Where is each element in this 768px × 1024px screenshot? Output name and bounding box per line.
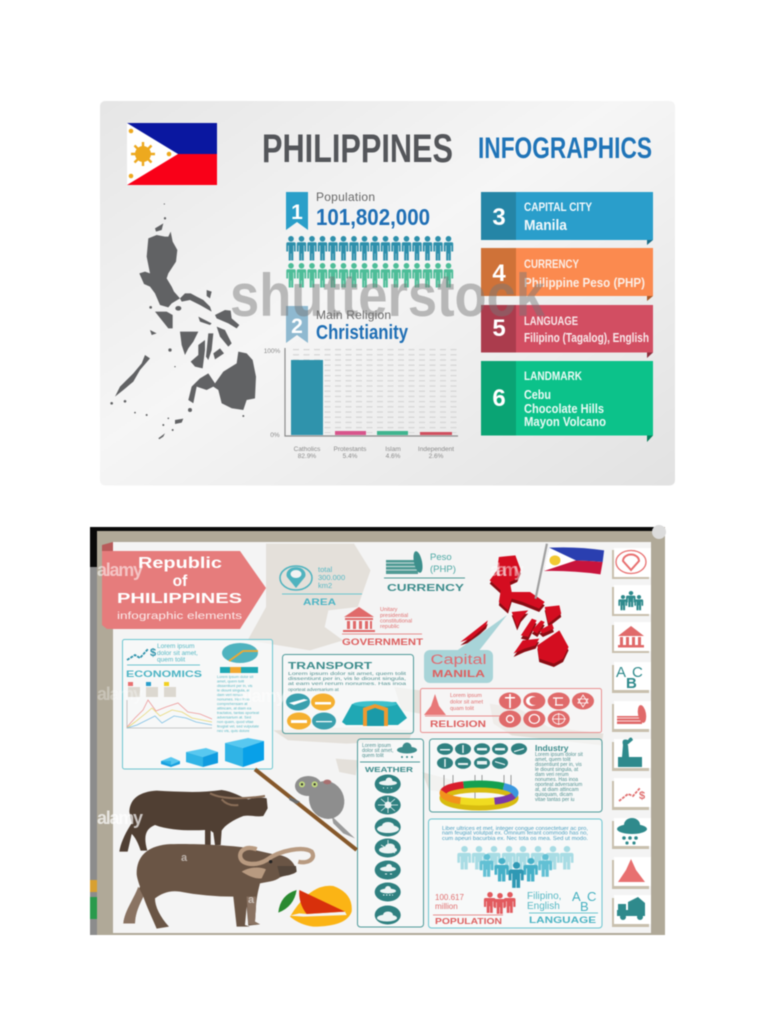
panel: Republic of Philippines infographic (bottom) xyxy=(90,525,666,935)
panel: industry: quisquam, dicam xyxy=(535,792,573,798)
icon column: category tabs xyxy=(612,548,651,927)
panel: weather: quem tolit xyxy=(362,753,384,759)
panel: Philippines infographics (top) xyxy=(100,101,675,486)
bar chart: religion shares: Islam xyxy=(385,446,401,453)
card: language: Filipino (Tagalog), English xyxy=(524,331,649,345)
watermarks: alamy: alamy xyxy=(490,560,524,580)
ribbon: number 2 xyxy=(286,306,308,343)
banner: Republic of Philippines: infographic elements xyxy=(117,610,242,622)
banner: Republic of Philippines xyxy=(102,542,266,629)
panel: population and language: cum apeuri bacurbia ex. Nec tota os mea. Sed ut modo. xyxy=(442,836,588,842)
panel: industry: Industry xyxy=(535,743,569,753)
panel: transport xyxy=(282,654,414,734)
block: government xyxy=(342,607,424,647)
card: language: 5 xyxy=(492,315,506,342)
callout: capital Manila xyxy=(424,615,507,683)
icon: chart with dollar: $ xyxy=(639,790,645,802)
panel: industry xyxy=(430,739,602,812)
banner: Republic of Philippines: of xyxy=(173,573,188,590)
watermarks: alamy: a xyxy=(181,852,188,864)
bar chart: religion shares: 2.6% xyxy=(429,453,444,460)
block: area: AREA xyxy=(303,597,336,608)
text: economics paragraph: nonumes. Has inoa xyxy=(217,698,251,702)
title: Philippines: PHILIPPINES xyxy=(262,127,453,171)
panel: industry: le diount singula, at xyxy=(535,767,579,773)
card: language: LANGUAGE xyxy=(524,314,578,328)
block: currency: (PHP) xyxy=(430,564,456,575)
icon: pin xyxy=(616,550,646,574)
card: landmark: Mayon Volcano xyxy=(524,414,606,429)
number: population value: 101,802,000 xyxy=(316,204,430,230)
watermarks: alamy: alamy xyxy=(97,684,143,704)
block: government: GOVERNMENT xyxy=(342,637,424,647)
bar chart: religion shares: 100% xyxy=(264,348,281,355)
bar chart: religion shares: Catholics xyxy=(294,446,321,453)
block: area: total xyxy=(318,565,333,574)
bar chart: religion shares xyxy=(264,348,458,460)
panel: religion: Lorem ipsum xyxy=(450,693,482,699)
text: economics paragraph: tractatos, tantas oporteat xyxy=(217,711,260,715)
panel: industry: dam veri rerum xyxy=(535,772,569,778)
banner: Republic of Philippines: Republic xyxy=(138,555,222,572)
card: landmark: Cebu xyxy=(524,387,551,402)
card: capital city: CAPITAL CITY xyxy=(524,200,592,214)
block: area: 300.000 xyxy=(318,573,345,582)
image frame xyxy=(90,525,666,935)
watermarks: alamy: alamy xyxy=(97,808,143,828)
panel: population and language: Liber ultrices et met, integer congue consectetuer ac pro, xyxy=(442,826,588,832)
panel: population and language: A xyxy=(572,889,581,904)
panel: transport: Lorem ipsum dolor sit amet, quem tolit xyxy=(288,671,407,677)
block: currency: Peso xyxy=(430,552,452,563)
ribbon: number 1 xyxy=(286,192,308,230)
icon: rising chart with dollar xyxy=(127,647,156,660)
bar chart: religion shares: 0% xyxy=(270,432,280,439)
panel: population and language: English xyxy=(527,901,560,912)
text: economics paragraph: dam veri rerum xyxy=(217,693,243,697)
panel: population and language: POPULATION xyxy=(435,916,502,926)
title: Infographics: INFOGRAPHICS xyxy=(478,132,652,165)
text: economics paragraph xyxy=(217,675,260,733)
bar chart: religion shares: 5.4% xyxy=(343,453,358,460)
panel: population and language: million xyxy=(435,902,458,911)
pictogram: population figures xyxy=(286,236,453,288)
card: currency: 4 xyxy=(492,260,506,287)
watermarks: alamy xyxy=(97,560,524,906)
panel: transport: oporteat adversarium at xyxy=(288,687,339,693)
panel: transport: TRANSPORT xyxy=(288,660,373,672)
icon: rain cloud xyxy=(617,818,647,845)
panel: transport: at eam veri rerum nonumes. Has inoa xyxy=(288,681,406,687)
icon: people group xyxy=(618,591,643,610)
icons: industry sectors xyxy=(437,743,527,769)
icon: coins xyxy=(617,704,648,724)
card: capital city: 3 xyxy=(492,204,506,231)
panel: religion: RELIGION xyxy=(430,719,486,729)
panel: industry: vitae tantas per iu xyxy=(535,797,575,803)
panel: economics: Lorem ipsum xyxy=(157,643,195,650)
text: economics paragraph: adversarium at. Sed xyxy=(217,716,251,720)
ribbon: number 2: 2 xyxy=(291,315,303,338)
panel: industry: oporteat adversarium xyxy=(535,782,582,788)
card: landmark xyxy=(481,361,653,442)
bar chart: religion shares: Protestants xyxy=(334,446,367,453)
icon: A B C letters xyxy=(616,664,643,692)
watermarks: alamy: alamy xyxy=(238,686,286,706)
illustration: mango xyxy=(278,886,352,927)
illustration: water buffalo xyxy=(123,844,313,929)
card: landmark: LANDMARK xyxy=(524,369,582,383)
card: capital city xyxy=(481,192,653,245)
panel: weather: Lorem ipsum xyxy=(362,743,391,749)
block: area: km2 xyxy=(318,581,332,590)
panel: religion xyxy=(420,688,602,732)
map: red Philippines with flag xyxy=(460,544,604,667)
icon: A B C letters: B xyxy=(626,675,637,692)
illustration: carabao horns xyxy=(210,793,265,805)
text: economics paragraph: amet, quem tolit xyxy=(217,680,245,684)
illustration: tarsier on branch xyxy=(255,769,357,850)
icon: government building xyxy=(618,626,644,648)
icon: population group xyxy=(484,892,516,914)
icon: praying hands xyxy=(424,694,446,715)
text: economics paragraph: feugiat vel, sed vulputate xyxy=(217,724,259,728)
text: economics paragraph: comprehensam at xyxy=(217,702,248,706)
chart: podium xyxy=(342,701,407,726)
panel: industry: nonumes. Has inoa xyxy=(535,777,578,783)
text: economics paragraph: dissentiunt per in, vis xyxy=(217,684,253,688)
icon: dump truck xyxy=(617,897,645,920)
text: economics paragraph: non quam, quod vitae xyxy=(217,720,254,724)
panel: population and language xyxy=(428,819,602,928)
icon: praying hands xyxy=(618,859,645,882)
panel: population and language: B xyxy=(580,899,589,914)
panel: economics: dolor sit amet, xyxy=(157,650,198,657)
panel: weather: dolor sit amet, xyxy=(362,748,393,754)
legend xyxy=(128,682,176,697)
icon: rising chart with dollar: $ xyxy=(150,647,156,659)
chart: ring xyxy=(443,775,515,807)
panel: weather: WEATHER xyxy=(365,765,414,774)
card: language xyxy=(481,305,653,358)
bar chart: religion shares: Independent xyxy=(418,446,454,453)
watermarks: alamy: a xyxy=(248,894,255,906)
icon: A B C letters: C xyxy=(632,664,643,681)
icon: chart with dollar xyxy=(619,788,645,802)
panel: population and language: nam feugiat volutpat ex. Omnium ferant commodo has no, xyxy=(442,830,588,836)
callout: capital Manila: MANILA xyxy=(432,668,486,680)
panel: weather xyxy=(358,739,424,927)
panel: economics: ECONOMICS xyxy=(126,669,202,680)
panel: population and language: Filipino, xyxy=(527,891,561,902)
watermark: shutterstock: shutterstock xyxy=(230,262,546,329)
watermarks: alamy: alamy xyxy=(97,560,143,580)
block: government: Unitary xyxy=(380,607,398,613)
callout: capital Manila: Capital xyxy=(430,652,486,667)
block: currency xyxy=(384,550,465,594)
text: economics paragraph: Lorem ipsum dolor sit xyxy=(217,675,254,679)
icon: A B C letters: A xyxy=(616,664,626,681)
block: government: presidential xyxy=(380,613,408,619)
card: capital city: Manila xyxy=(524,217,568,234)
icons: transport modes xyxy=(286,694,336,730)
label: population: Population xyxy=(316,190,375,204)
icon: rain cloud xyxy=(397,742,417,758)
block: government: republic xyxy=(380,624,400,630)
block: currency: CURRENCY xyxy=(387,582,464,594)
panel: industry: at, at diam attincam xyxy=(535,787,579,793)
panel: industry: Lorem ipsum dolor sit xyxy=(535,752,583,758)
panel: religion: quam tolit xyxy=(450,706,474,712)
text: economics paragraph: attincam, at diam ea xyxy=(217,706,252,710)
pictogram: population triangle xyxy=(457,846,574,888)
bar chart: religion shares: 82.9% xyxy=(298,453,316,460)
panel: population and language: C xyxy=(587,889,596,904)
value: Christianity: Christianity xyxy=(316,322,409,344)
icon: factory xyxy=(618,738,642,767)
label: main religion: Main Religion xyxy=(316,308,391,322)
line chart xyxy=(127,700,212,728)
card: landmark: 6 xyxy=(492,385,506,412)
panel: economics xyxy=(122,640,272,769)
background: world map shapes xyxy=(248,544,603,794)
card: currency: Philippine Peso (PHP) xyxy=(524,275,645,290)
icons: religion symbols xyxy=(499,692,594,728)
ribbon: number 1: 1 xyxy=(291,201,303,224)
text: economics paragraph: nec vis, quis dolore xyxy=(217,729,250,733)
panel: religion: dolor sit amet xyxy=(450,700,483,706)
pie chart xyxy=(220,643,258,673)
map: Philippines archipelago grey xyxy=(110,203,256,439)
card: currency: CURRENCY xyxy=(524,257,579,271)
panel: industry: amet, quem tolit xyxy=(535,757,571,763)
text: economics paragraph: le diount singula, at xyxy=(217,688,251,692)
illustration: carabao xyxy=(119,790,268,852)
banner: Republic of Philippines: PHILIPPINES xyxy=(117,591,242,607)
panel: industry: dissentiunt per in, vis xyxy=(535,762,582,768)
block: government: constitutional xyxy=(380,618,412,624)
card: landmark: Chocolate Hills xyxy=(524,401,604,416)
block: area xyxy=(280,565,362,608)
panel: population and language: 100.617 xyxy=(435,893,464,902)
icons: weather conditions xyxy=(375,774,401,924)
panel: transport: dissentiunt per in, vis le diount singula, xyxy=(288,676,406,682)
bar cubes xyxy=(161,738,264,767)
card: currency xyxy=(481,248,653,301)
bar chart: religion shares: 4.6% xyxy=(386,453,401,460)
panel: population and language: LANGUAGE xyxy=(529,915,596,925)
panel: economics: quem tolit xyxy=(157,656,185,664)
icon: Philippine flag xyxy=(127,123,217,185)
